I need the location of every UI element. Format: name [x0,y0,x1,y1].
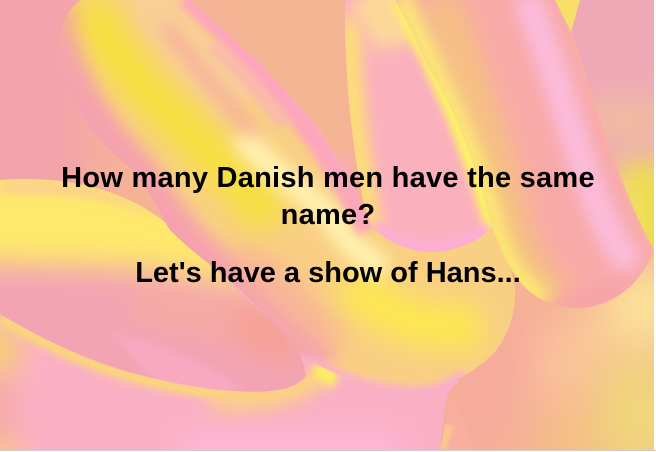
top left tube and blob [58,0,515,392]
small lower wedge [440,424,454,450]
cream highlight [240,135,385,270]
question heading: How many Danish men have the same name? [61,162,595,231]
central pink surface [340,0,500,255]
blob underside [305,360,465,393]
yellow rim under fold [0,318,320,396]
peach shoulder [140,0,240,105]
left dusky shading [61,5,320,370]
lower left tube [0,271,460,450]
punchline text: Let's have a show of Hans... [135,257,521,289]
bottom edge line [0,450,656,451]
main yellow ridge [90,0,275,222]
pink ribbon edge [186,0,368,230]
pink fold inside lower left tube [0,179,306,392]
far right pink to yellow panel [555,0,656,270]
main right tube [390,0,656,315]
